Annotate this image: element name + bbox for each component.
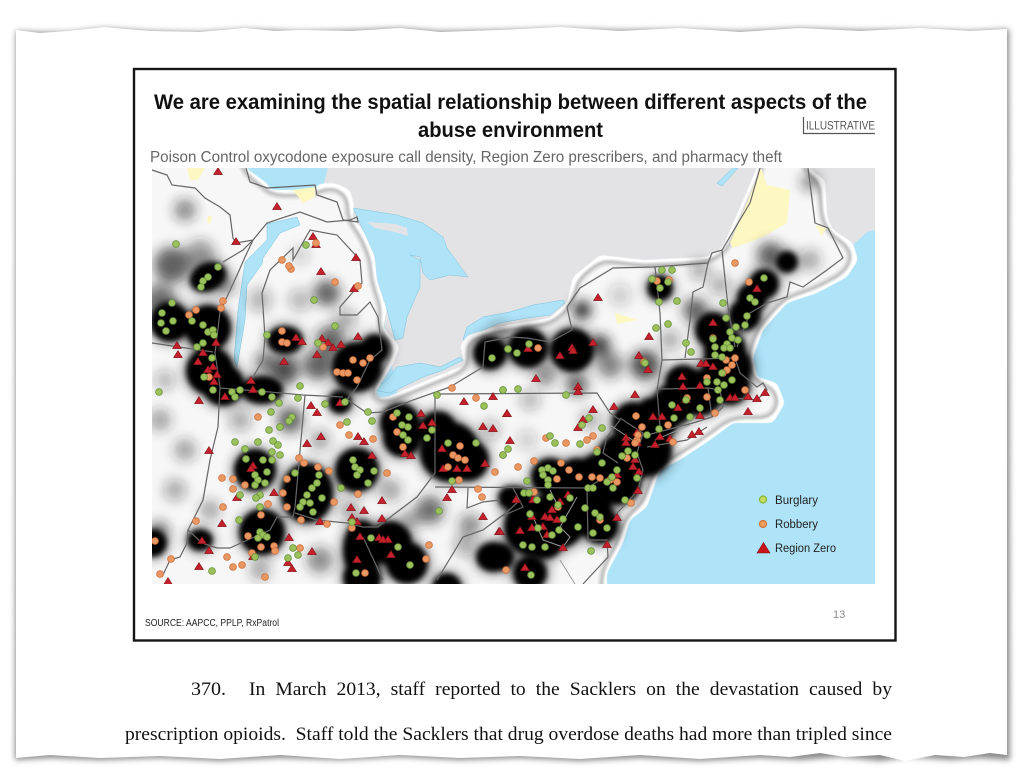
- legend: burglary: Burglary: [775, 495, 818, 507]
- Canada land: [322, 168, 875, 410]
- water background: [247, 168, 875, 584]
- high density black clusters: [144, 256, 793, 598]
- slide title: We are examining the spatial relationship between different aspects of the: [154, 90, 867, 114]
- low density gray shading: [144, 173, 820, 580]
- body paragraph: 370.: [191, 679, 226, 700]
- Burglary points: [159, 244, 764, 575]
- density coverage area: [152, 168, 858, 584]
- slide title: abuse environment: [418, 118, 603, 142]
- Manitoulin island: [367, 222, 408, 236]
- legend: [757, 495, 836, 555]
- illustrative tag: ILLUSTRATIVE: [806, 120, 875, 132]
- legend: region zero: Region Zero: [775, 543, 836, 555]
- Robbery points: [155, 243, 749, 577]
- body paragraph: In March 2013, staff reported to the Sacklers on the devastation caused by: [249, 679, 893, 700]
- map: [152, 168, 875, 584]
- illustrative tag: [804, 117, 875, 134]
- legend: robbery: Robbery: [775, 519, 818, 531]
- slide title: [154, 90, 867, 142]
- source note: SOURCE: AAPCC, PPLP, RxPatrol: [145, 618, 279, 629]
- subtitle: Poison Control oxycodone exposure call density, Region Zero prescribers, and pharmacy theft: [150, 149, 783, 166]
- slide number: 13: [833, 609, 845, 621]
- state borders: [152, 168, 843, 584]
- no-data yellow areas: [187, 168, 826, 324]
- body paragraph: prescription opioids. Staff told the Sacklers that drug overdose deaths had more than tripled since: [125, 724, 892, 745]
- body paragraph: [125, 679, 893, 745]
- Chesapeake light borders: [530, 425, 690, 584]
- slide panel: [120, 69, 896, 640]
- Lake Michigan: [234, 217, 300, 367]
- Region Zero triangles: [168, 172, 765, 582]
- lakes Huron, Erie, Ontario: [353, 168, 738, 393]
